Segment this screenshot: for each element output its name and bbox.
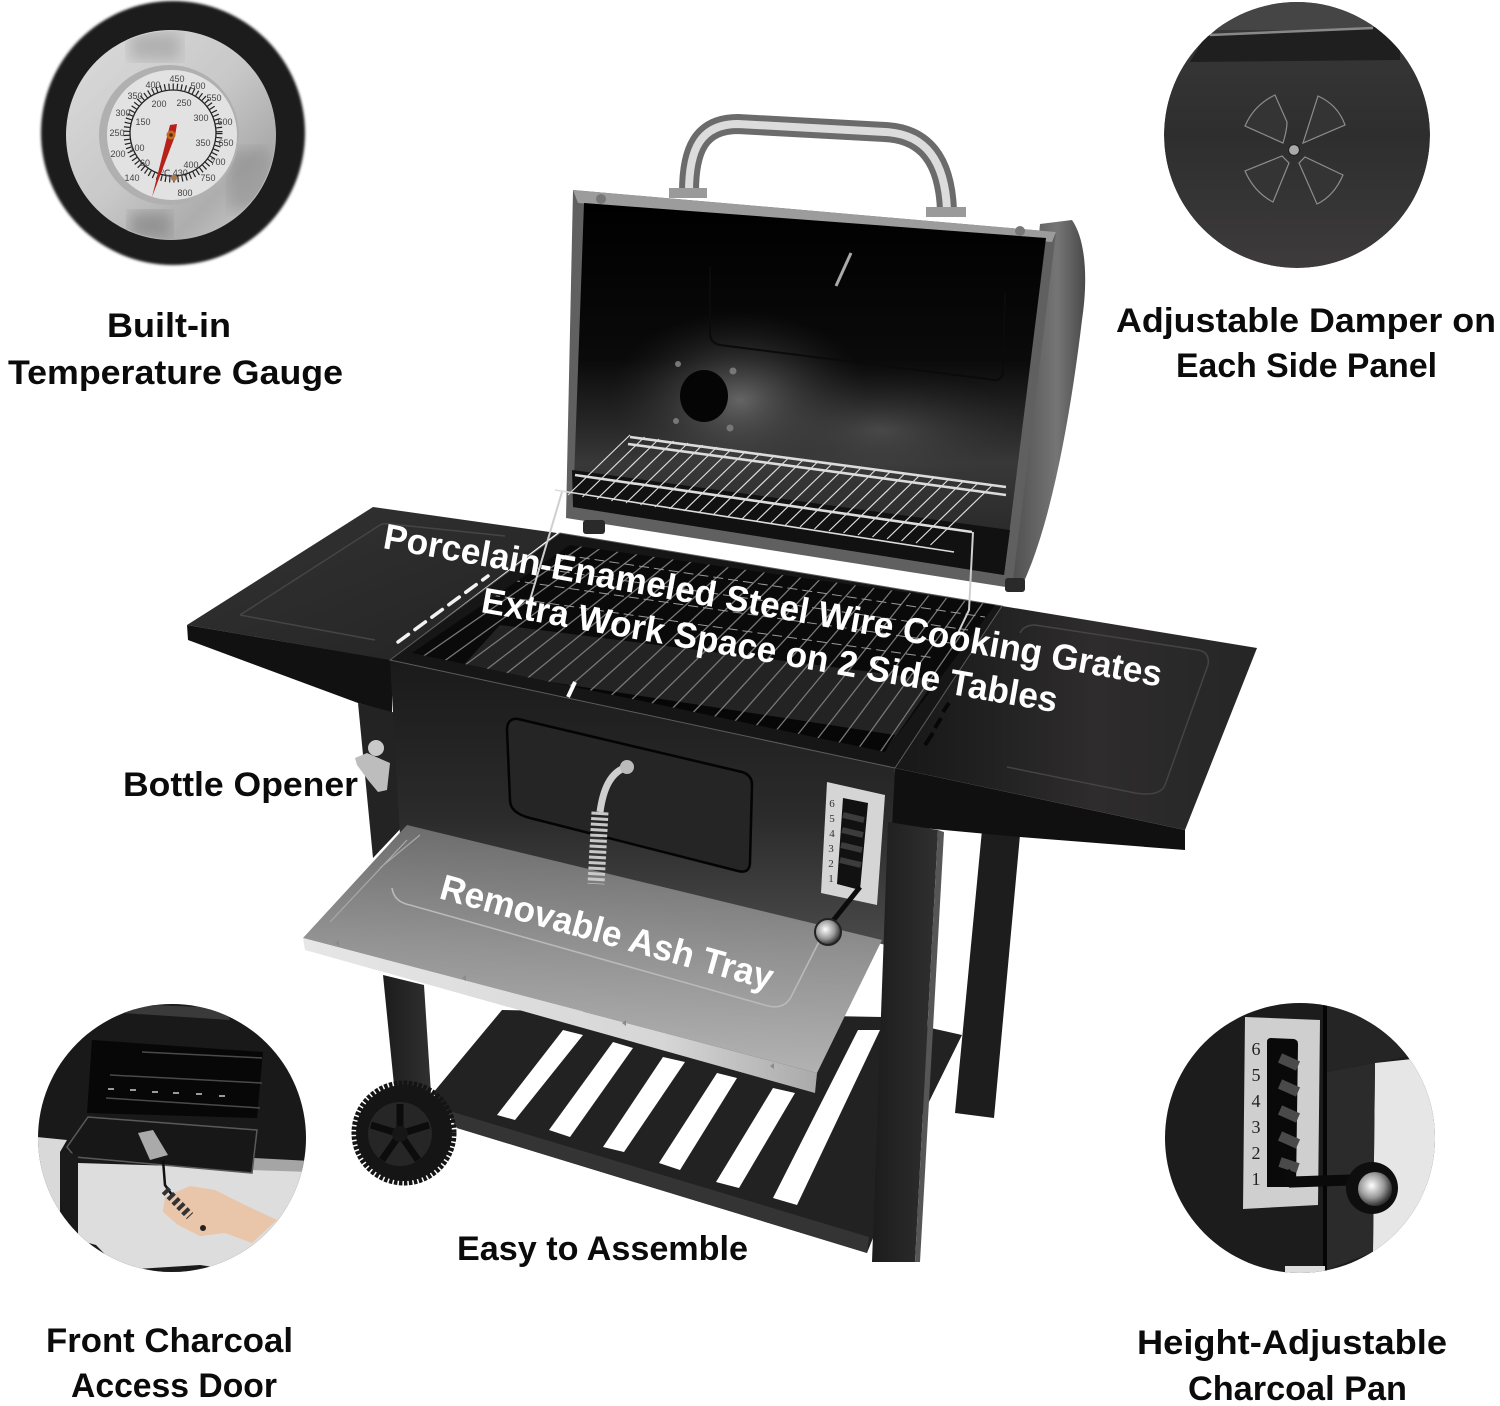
label: side tables: Extra Work Space on 2 Side Tables: [479, 579, 1061, 720]
front right leg: [872, 822, 944, 1262]
label: built-in temperature gauge: Built-in: [107, 307, 231, 345]
gauge dial numbers: 400: [183, 160, 199, 170]
slider plate: [1243, 1017, 1320, 1209]
lid handle: [689, 124, 947, 210]
thermometer probe: [836, 253, 851, 286]
label: height-adjustable: Height-Adjustable: [1137, 1324, 1447, 1362]
height slider plate: 4: [829, 828, 835, 840]
door latch handle: [138, 1130, 168, 1160]
lid interior: [573, 203, 1046, 575]
icon: front charcoal access door close-up: [38, 1004, 306, 1272]
gauge dial numbers: 650: [218, 138, 234, 148]
pan slot notches: [1280, 1058, 1298, 1168]
damper fan blades: [1245, 95, 1345, 204]
table fold dashes: [398, 576, 488, 642]
height slider plate: [815, 782, 885, 945]
gauge dial numbers: 140: [124, 173, 140, 183]
hand holding handle: [163, 1186, 277, 1243]
gauge dial numbers: 400: [145, 80, 161, 90]
gauge dial numbers: 200: [151, 99, 167, 109]
lower shelf: [433, 1010, 962, 1253]
gauge dial numbers: 800: [177, 188, 193, 198]
gauge dial numbers: ℃ 430: [160, 168, 188, 178]
grill leg and base: [68, 1153, 210, 1272]
lid frame: [566, 190, 1056, 588]
slider level numbers: 4: [1252, 1091, 1260, 1111]
wheel: [354, 1083, 454, 1183]
gauge dial numbers: 500: [190, 81, 206, 91]
gauge dial numbers: [109, 74, 234, 198]
label line: access door: Access Door: [71, 1367, 277, 1405]
gauge needle: [152, 124, 177, 197]
height slider plate: 5: [829, 813, 835, 825]
charcoal door panel: [507, 719, 752, 884]
label: cooking grates: Porcelain-Enameled Steel Wire Cooking Grates: [381, 516, 1166, 694]
height slider plate: 6: [829, 798, 835, 810]
warming rack: [530, 435, 1006, 633]
gauge dial numbers: 300: [115, 108, 131, 118]
gauge dial numbers: 150: [135, 117, 151, 127]
slider level numbers: 1: [1252, 1169, 1260, 1189]
icon: height-adjustable charcoal pan close-up: [1165, 1003, 1435, 1273]
removable ash tray: [303, 825, 882, 1093]
height slider plate: 1: [828, 873, 834, 885]
grill lid: [566, 124, 1085, 592]
slider level numbers: [1252, 1039, 1260, 1189]
cooking grate: [390, 533, 1005, 768]
label line: each side panel: Each Side Panel: [1176, 347, 1437, 385]
door handle and spring: [600, 767, 627, 812]
gauge dial numbers: 550: [206, 93, 222, 103]
label: easy to assemble: Easy to Assemble: [457, 1230, 748, 1268]
charcoal tray door: [67, 1117, 257, 1173]
gauge dial numbers: 300: [193, 113, 209, 123]
height slider plate: 2: [828, 858, 834, 870]
bottle opener: [355, 740, 390, 792]
label: removable ash tray: Removable Ash Tray: [436, 866, 778, 998]
gauge dial numbers: 600: [217, 117, 233, 127]
grill illustration: [187, 124, 1257, 1262]
label: adjustable damper: Adjustable Damper on: [1116, 302, 1496, 340]
grill body front: [358, 660, 895, 945]
label line: temperature gauge: Temperature Gauge: [8, 354, 343, 392]
background light wall: [38, 1137, 67, 1212]
slider level numbers: 6: [1252, 1039, 1260, 1059]
right side table: [890, 606, 1257, 850]
gauge dial numbers: 250: [176, 98, 192, 108]
gauge dial numbers: 350: [195, 138, 211, 148]
icon: temperature gauge close-up: [41, 1, 305, 265]
rear right leg: [955, 830, 1020, 1118]
height slider plate: 3: [828, 843, 834, 855]
label: bottle opener: Bottle Opener: [123, 766, 358, 804]
shelf slat gaps: [497, 1030, 880, 1205]
gauge dial numbers: 350: [127, 91, 143, 101]
pan lever knob: [1285, 1162, 1398, 1214]
label: front charcoal: Front Charcoal: [46, 1322, 293, 1360]
gauge dial numbers: 100: [129, 143, 145, 153]
gauge dial numbers: 750: [200, 173, 216, 183]
lid exterior side: [1005, 220, 1085, 590]
gauge dial numbers: 60: [140, 158, 150, 168]
gauge dial numbers: 700: [210, 157, 226, 167]
left side table: [187, 507, 557, 713]
gauge dial numbers: 200: [110, 149, 126, 159]
lid recessed panel: [710, 267, 1005, 380]
slider level numbers: 2: [1252, 1143, 1260, 1163]
lid vent hole: [680, 370, 728, 422]
rear left leg: [383, 975, 431, 1093]
icon: adjustable damper close-up: [1160, 0, 1440, 268]
slider level numbers: 3: [1252, 1117, 1260, 1137]
lid hinges: [583, 520, 1025, 592]
gauge dial numbers: 450: [169, 74, 185, 84]
access door opening: [87, 1040, 263, 1118]
gauge dial numbers: 250: [109, 128, 125, 138]
slider level numbers: 5: [1252, 1065, 1260, 1085]
